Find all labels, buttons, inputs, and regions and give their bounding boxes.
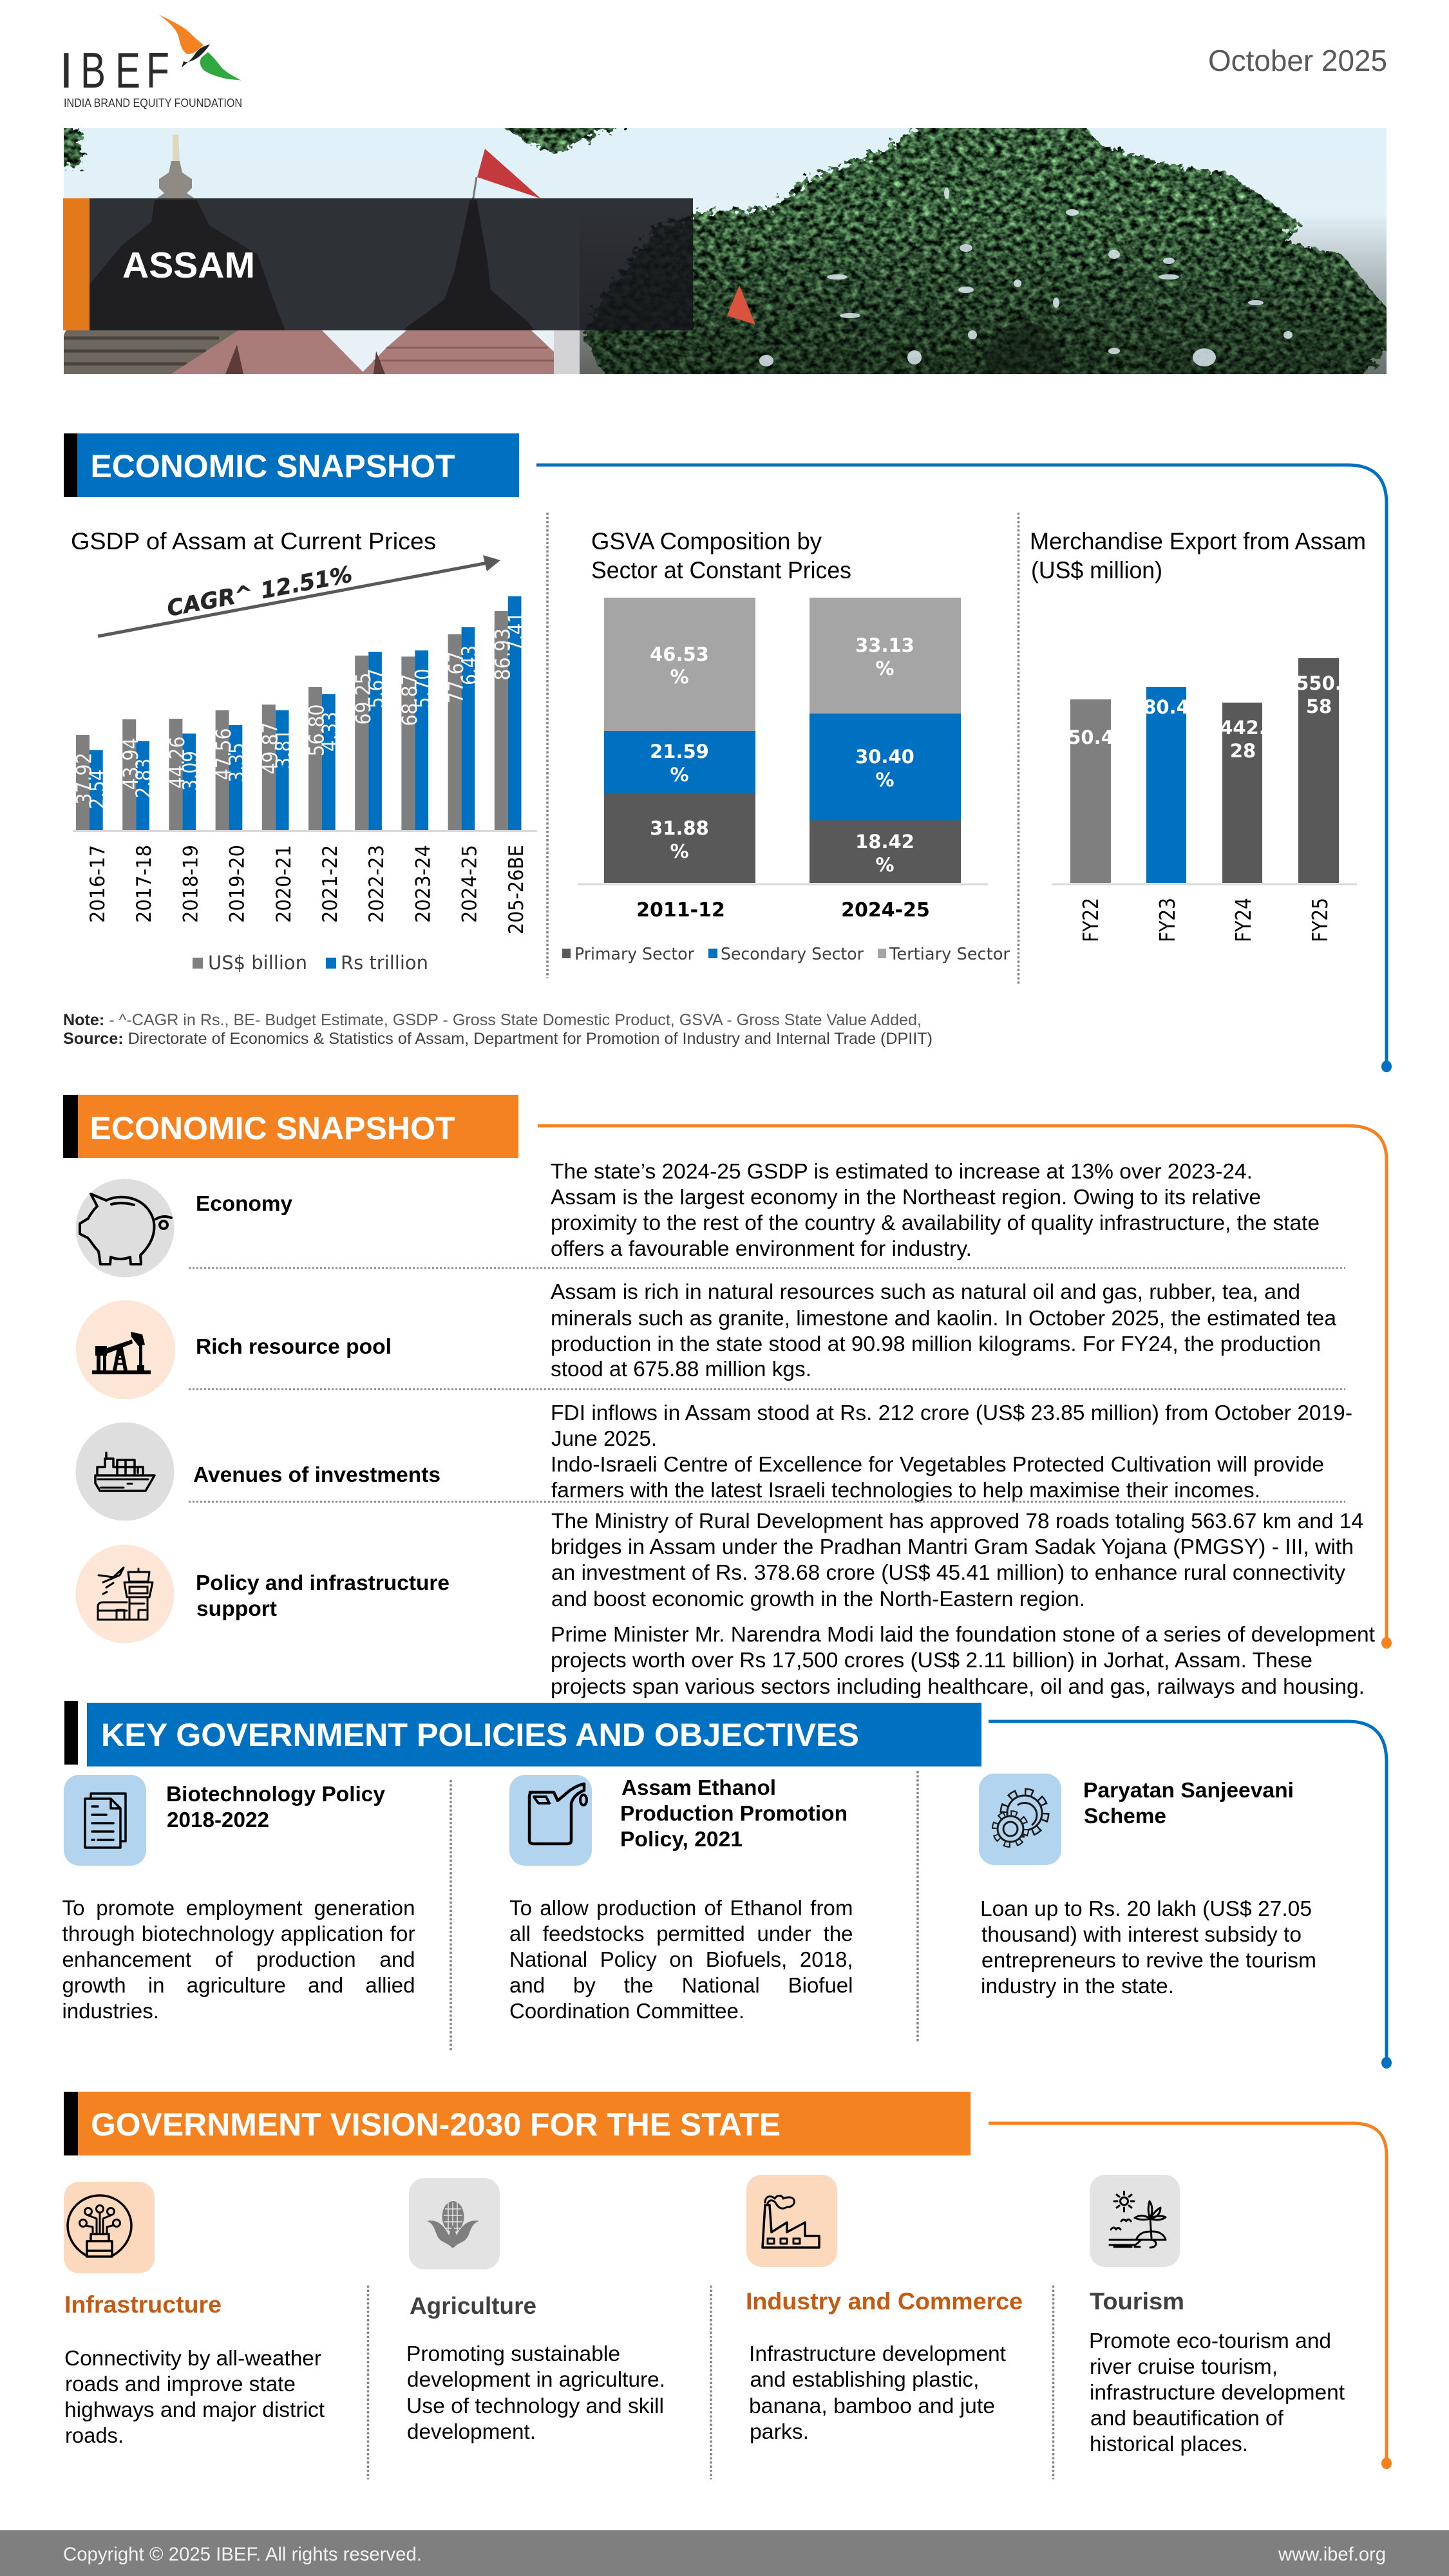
description: bridges in Assam under the Pradhan Mantri Gram Sadak Yojana (PMGSY) - III, with: [551, 1535, 1354, 1558]
Rs trillion labels: 2.83: [131, 759, 156, 799]
US$ billion labels: 69.25: [351, 672, 375, 725]
bar labels: 50.4: [1068, 726, 1114, 748]
vision: industry and commerce: [746, 2175, 1023, 2443]
sky gaps in tree: [735, 187, 1293, 366]
US$ billion labels: 43.94: [118, 738, 143, 790]
orange accent bar: [63, 198, 90, 330]
policy: ethanol: [509, 1775, 853, 2023]
description: production in the state stood at 90.98 million kilograms. For FY24, the production: [551, 1332, 1321, 1356]
year axis labels: [86, 845, 528, 934]
white building: [554, 330, 605, 374]
legend: Primary Sector: [574, 945, 694, 964]
logo wordmark: B: [80, 42, 106, 99]
icon: oil pump: [76, 1300, 175, 1399]
stacked bar 2024-25: %: [875, 658, 895, 679]
small flag: [727, 285, 755, 325]
vision description: banana, bamboo and jute: [749, 2394, 995, 2418]
US$ billion labels: 49.87: [258, 723, 282, 774]
category labels: 2024-25: [841, 899, 930, 922]
US$ billion bars: [76, 611, 508, 830]
notes and source: Note: - ^-CAGR in Rs., BE- Budget Estimate, GSDP - Gross State Domestic Product, GSVA - Gross State Value Added,: [63, 1011, 922, 1029]
description: proximity to the rest of the country & availability of quality infrastructure, the state: [551, 1211, 1320, 1235]
vision: infrastructure: [64, 2182, 325, 2447]
Rs trillion labels: 3.09: [178, 751, 202, 791]
blue connector line 3: [989, 1721, 1392, 2069]
legend: Rs trillion: [341, 952, 428, 974]
axis labels: FY23: [1155, 898, 1180, 942]
policy title: [620, 1776, 848, 1851]
stacked bar 2024-25: %: [875, 854, 895, 876]
US$ billion labels: 68.87: [397, 674, 422, 726]
policy description: all feedstocks permitted under the: [509, 1922, 853, 1946]
description: [551, 1509, 1375, 1698]
policy title: Paryatan Sanjeevani: [1083, 1778, 1294, 1802]
Rs trillion labels: 5.67: [364, 668, 388, 708]
Rs trillion labels: 4.33: [317, 712, 342, 752]
logo: IBEF: [59, 15, 242, 109]
footer: www.ibef.org: [1278, 2544, 1386, 2565]
logo tagline: INDIA BRAND EQUITY FOUNDATION: [64, 97, 242, 109]
policy title: Biotechnology Policy: [166, 1782, 386, 1806]
stacked bar 2011-12: %: [670, 666, 689, 688]
spire: [173, 135, 180, 161]
policy description: To allow production of Ethanol from: [509, 1896, 853, 1920]
Rs trillion labels: 3.35: [225, 743, 249, 782]
vision title: Infrastructure: [64, 2291, 222, 2318]
Rs trillion labels: [85, 612, 528, 809]
description: farmers with the latest Israeli technologies to help maximise their incomes.: [551, 1478, 1260, 1502]
pink roofs: [171, 330, 365, 374]
description: offers a favourable environment for industry.: [551, 1236, 972, 1260]
vision title: Industry and Commerce: [746, 2288, 1023, 2315]
row: economy: [76, 1159, 1320, 1278]
year axis labels: 2021-22: [319, 845, 342, 923]
CAGR arrow: CAGR^ 12.51%: [165, 562, 354, 622]
axis labels: FY22: [1078, 898, 1103, 942]
notes and source: Source: Directorate of Economics & Statistics of Assam, Department for Promotion of Industry and Internal Trade (DPIIT): [63, 1030, 933, 1048]
year axis labels: 2024-25: [459, 845, 482, 923]
logo bird: black bird: [182, 44, 210, 68]
footer: [0, 2530, 1449, 2576]
description: stood at 675.88 million kgs.: [551, 1357, 811, 1381]
US$ billion labels: 77.67: [444, 652, 468, 703]
vision description: infrastructure development: [1090, 2380, 1345, 2404]
title band: [63, 198, 693, 330]
legend: US$ billion: [208, 952, 307, 974]
vision description: [749, 2342, 1006, 2443]
stacked bar 2011-12: %: [670, 764, 689, 786]
label: Economy: [196, 1191, 293, 1215]
US$ billion labels: 44.26: [165, 737, 189, 788]
legend: [562, 945, 1010, 964]
Rs trillion labels: 6.43: [457, 645, 482, 685]
chart title: GSVA Composition by: [591, 528, 822, 554]
vision description: Promote eco-tourism and: [1089, 2329, 1331, 2353]
year axis labels: 2016-17: [86, 845, 109, 923]
label: Policy and infrastructure: [196, 1571, 450, 1595]
policy description: growth in agriculture and allied: [62, 1973, 415, 1997]
CAGR arrow: [98, 555, 500, 636]
bar labels: 442.: [1220, 717, 1266, 739]
heading: economic snapshot charts: [64, 433, 519, 497]
bar labels: 58: [1306, 696, 1332, 717]
chart title: (US$ million): [1031, 557, 1162, 583]
bar labels: 28: [1230, 740, 1256, 762]
policy description: and by the National Biofuel: [509, 1973, 853, 1997]
vision description: development in agriculture.: [407, 2367, 665, 2391]
axis labels: FY24: [1231, 898, 1256, 942]
policy title: [166, 1782, 386, 1832]
state name: ASSAM: [122, 245, 255, 286]
footer: Copyright © 2025 IBEF. All rights reserved.: [63, 2544, 422, 2565]
vision description: roads.: [65, 2423, 124, 2447]
chart: GSDP of Assam: [71, 528, 537, 974]
policy description: enhancement of production and: [62, 1947, 415, 1971]
stacked bar 2024-25: 30.40: [855, 746, 914, 768]
chart title: [591, 528, 851, 583]
hero photo: temple and tree: [64, 128, 1387, 374]
heading: economic snapshot details: [63, 1095, 518, 1158]
category labels: 2011-12: [636, 899, 725, 922]
blue connector line 1: [536, 465, 1392, 1072]
US$ billion labels: [72, 629, 515, 805]
vision description: roads and improve state: [65, 2372, 296, 2396]
orange connector line 2: [538, 1126, 1392, 1649]
policy description: industry in the state.: [981, 1974, 1174, 1998]
stacked bar 2024-25: 33.13: [855, 634, 914, 656]
row: avenues of investments: [76, 1401, 1352, 1521]
heading: government vision 2030: [64, 2092, 971, 2155]
vision description: Use of technology and skill: [406, 2394, 664, 2418]
icon: document: [64, 1775, 146, 1866]
second spire: [402, 200, 535, 330]
logo bird: orange wing: [159, 15, 204, 54]
policy description: To promote employment generation: [62, 1896, 415, 1920]
label: Avenues of investments: [193, 1463, 440, 1486]
icon: palm island: [1090, 2175, 1180, 2267]
vision description: historical places.: [1090, 2432, 1248, 2456]
vision description: [64, 2346, 325, 2447]
row: rich resource pool: [76, 1280, 1337, 1399]
policy description: through biotechnology application for: [62, 1922, 415, 1946]
vision description: parks.: [750, 2420, 809, 2443]
policy description: [509, 1896, 853, 2023]
date: October 2025: [1208, 44, 1387, 77]
notes and source: [63, 1011, 933, 1048]
axis labels: FY25: [1307, 898, 1332, 942]
tree foliage: [582, 122, 1401, 386]
vision description: [1089, 2329, 1345, 2456]
bar labels: 550.: [1296, 672, 1342, 694]
policy title: [1083, 1778, 1294, 1828]
chart title: Sector at Constant Prices: [591, 557, 851, 583]
US$ billion labels: 86.93: [490, 629, 515, 680]
description: FDI inflows in Assam stood at Rs. 212 crore (US$ 23.85 million) from October 2019-: [551, 1401, 1352, 1425]
vision description: [406, 2342, 665, 2443]
policy title: Assam Ethanol: [621, 1776, 776, 1799]
icon: airport: [76, 1544, 174, 1643]
Rs trillion labels: 5.70: [410, 668, 435, 708]
stacked bar 2011-12: 46.53: [650, 643, 709, 665]
logo bird: green wing: [200, 52, 242, 80]
description: projects span various sectors including healthcare, oil and gas, railways and housing.: [551, 1674, 1365, 1698]
description: an investment of Rs. 378.68 crore (US$ 45.41 million) to enhance rural connectivity: [551, 1560, 1346, 1584]
description: [551, 1280, 1337, 1381]
icon: piggy bank: [76, 1179, 174, 1278]
policy description: National Policy on Biofuels, 2018,: [509, 1947, 853, 1971]
vision description: and establishing plastic,: [750, 2367, 979, 2391]
bars: [1070, 699, 1111, 883]
icon: corn: [409, 2178, 500, 2269]
bar labels: [1070, 676, 1339, 757]
stacked bar 2011-12: %: [670, 840, 689, 862]
policy: paryatan sanjeevani: [979, 1774, 1316, 1998]
stacked bar 2024-25: %: [875, 769, 895, 791]
heading: government vision 2030: GOVERNMENT VISION-2030 FOR THE STATE: [91, 2107, 781, 2143]
policy title: Production Promotion: [620, 1801, 848, 1825]
category labels: [636, 899, 930, 922]
heading: key government policies: KEY GOVERNMENT POLICIES AND OBJECTIVES: [101, 1717, 859, 1753]
vision description: development.: [407, 2420, 536, 2443]
description: Assam is the largest economy in the Northeast region. Owing to its relative: [551, 1185, 1261, 1209]
vision: agriculture: [406, 2178, 665, 2443]
vision description: highways and major district: [64, 2398, 325, 2421]
vision title: Agriculture: [410, 2293, 536, 2319]
policy title: 2018-2022: [167, 1808, 269, 1832]
description: Indo-Israeli Centre of Excellence for Vegetables Protected Cultivation will provide: [551, 1452, 1324, 1476]
legend: [193, 952, 428, 974]
chart title: Merchandise Export from Assam: [1030, 528, 1366, 554]
icon: cargo ship: [76, 1422, 174, 1521]
logo wordmark: F: [146, 42, 169, 99]
heading: economic snapshot details: ECONOMIC SNAPSHOT: [90, 1110, 455, 1146]
icon: jerrycan: [509, 1775, 592, 1866]
policy description: [62, 1896, 415, 2023]
vision description: Connectivity by all-weather: [64, 2346, 321, 2370]
US$ billion labels: 37.92: [72, 752, 97, 805]
logo wordmark: [59, 42, 169, 99]
vision description: and beautification of: [1090, 2406, 1284, 2430]
policy description: entrepreneurs to revive the tourism: [981, 1948, 1316, 1972]
legend: Tertiary Sector: [889, 945, 1010, 964]
label: [196, 1571, 450, 1620]
vision description: river cruise tourism,: [1090, 2354, 1278, 2378]
stacked bar 2011-12: [604, 598, 755, 883]
Rs trillion labels: 3.81: [271, 729, 296, 769]
year axis labels: 205-26BE: [505, 845, 528, 934]
year axis labels: 2017-18: [133, 845, 156, 923]
year axis labels: 2018-19: [179, 845, 202, 923]
year axis labels: 2019-20: [226, 845, 249, 923]
Rs trillion labels: 7.41: [504, 612, 528, 652]
chart: merchandise export: [1030, 528, 1366, 942]
description: projects worth over Rs 17,500 crores (US$ 2.11 billion) in Jorhat, Assam. These: [551, 1648, 1312, 1672]
description: June 2025.: [551, 1426, 657, 1450]
description: The Ministry of Rural Development has approved 78 roads totaling 563.67 km and 14: [551, 1509, 1363, 1533]
icon: factory: [746, 2175, 837, 2267]
axis labels: [1078, 898, 1332, 942]
US$ billion labels: 47.56: [211, 728, 236, 781]
top foliage: [58, 122, 638, 169]
description: Prime Minister Mr. Narendra Modi laid the foundation stone of a series of development: [551, 1622, 1375, 1646]
bar labels: 80.4: [1143, 696, 1189, 718]
chart: GSVA composition: [562, 528, 1010, 964]
policy: biotechnology: [62, 1775, 415, 2023]
policy description: thousand) with interest subsidy to: [981, 1922, 1302, 1946]
vision title: Tourism: [1090, 2288, 1184, 2315]
logo wordmark: E: [115, 42, 140, 99]
chart title: [1030, 528, 1366, 583]
Rs trillion bars: [90, 596, 522, 830]
description: The state’s 2024-25 GSDP is estimated to increase at 13% over 2023-24.: [551, 1159, 1253, 1183]
row: policy and infrastructure support: [76, 1509, 1375, 1698]
year axis labels: 2020-21: [272, 845, 296, 923]
Rs trillion labels: 2.54: [85, 769, 109, 809]
US$ billion labels: 56.80: [305, 705, 329, 756]
heading: economic snapshot charts: ECONOMIC SNAPSHOT: [90, 448, 455, 484]
year axis labels: 2023-24: [412, 845, 435, 923]
left dome: [64, 200, 303, 374]
description: [551, 1401, 1352, 1502]
label: Rich resource pool: [196, 1334, 392, 1358]
vision description: Infrastructure development: [749, 2342, 1006, 2365]
heading: key government policies: [64, 1701, 981, 1766]
stacked bar 2011-12: 31.88: [650, 817, 709, 839]
policy title: Scheme: [1084, 1804, 1166, 1828]
policy description: [980, 1897, 1316, 1998]
stacked bar 2024-25: [810, 598, 961, 883]
stacked bar 2024-25: 18.42: [855, 831, 914, 853]
description: minerals such as granite, limestone and kaolin. In October 2025, the estimated tea: [551, 1306, 1337, 1330]
year axis labels: 2022-23: [365, 845, 388, 923]
policy description: industries.: [62, 1999, 159, 2023]
icon: gears: [979, 1774, 1061, 1865]
policy description: Loan up to Rs. 20 lakh (US$ 27.05: [980, 1897, 1312, 1920]
vision description: Promoting sustainable: [406, 2342, 620, 2365]
description: [551, 1159, 1320, 1260]
orange connector line 4: [989, 2123, 1392, 2469]
icon: circuit: [64, 2182, 155, 2273]
description: Assam is rich in natural resources such as natural oil and gas, rubber, tea, and: [551, 1280, 1300, 1303]
flag: [477, 149, 544, 202]
vision: tourism: [1089, 2175, 1345, 2456]
legend: Secondary Sector: [721, 945, 864, 964]
policy description: Coordination Committee.: [509, 1999, 744, 2023]
policy title: Policy, 2021: [620, 1827, 743, 1851]
chart title: GSDP of Assam at Current Prices: [71, 528, 436, 554]
label: support: [196, 1596, 277, 1620]
description: and boost economic growth in the North-Eastern region.: [551, 1587, 1085, 1611]
stacked bar 2011-12: 21.59: [650, 741, 709, 762]
logo wordmark: I: [59, 42, 73, 99]
